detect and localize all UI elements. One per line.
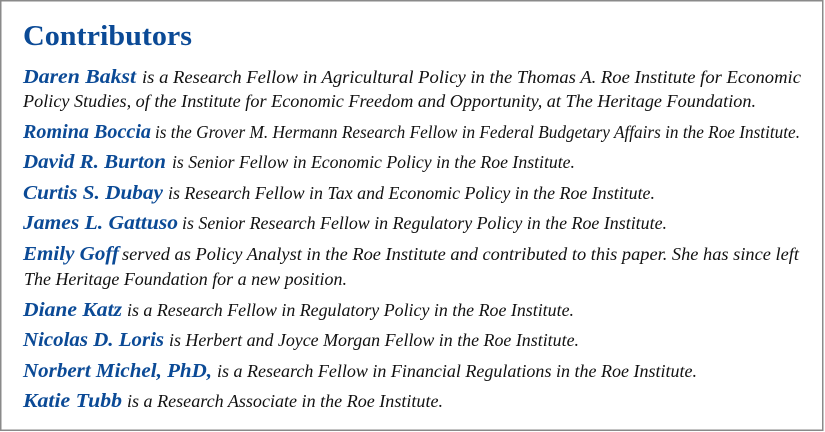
contributor: Daren Bakst: Daren Bakst xyxy=(22,66,138,88)
contributor: Romina Boccia: is the Grover M. Hermann Research Fellow in Federal Budgetary Affairs in the Roe Institute. xyxy=(155,122,800,142)
contributor: Diane Katz: Diane Katz xyxy=(22,299,122,321)
contributor: Curtis S. Dubay: Curtis S. Dubay xyxy=(23,182,163,204)
contributor: David R. Burton xyxy=(22,151,575,173)
contributor: David R. Burton: is Senior Fellow in Economic Policy in the Roe Institute. xyxy=(172,152,575,172)
heading: Contributors xyxy=(23,21,192,52)
contributor: Daren Bakst xyxy=(22,66,801,111)
contributor: Curtis S. Dubay: is Research Fellow in Tax and Economic Policy in the Roe Institute. xyxy=(168,183,655,203)
contributor: Norbert Michel: Norbert Michel, PhD, xyxy=(22,360,212,382)
contributor: Nicolas D. Loris: is Herbert and Joyce Morgan Fellow in the Roe Institute. xyxy=(169,330,579,350)
contributor: David R. Burton: David R. Burton xyxy=(22,151,166,173)
contributor: Diane Katz: is a Research Fellow in Regulatory Policy in the Roe Institute. xyxy=(127,300,574,320)
contributor: James L. Gattuso: James L. Gattuso xyxy=(22,212,178,234)
contributor: Norbert Michel: is a Research Fellow in Financial Regulations in the Roe Institute. xyxy=(217,361,697,381)
contributor: Nicolas D. Loris xyxy=(22,329,579,351)
contributor: Emily Goff: served as Policy Analyst in the Roe Institute and contributed to this paper. She has since left xyxy=(122,244,800,264)
contributor: Katie Tubb xyxy=(22,390,443,412)
contributor: Katie Tubb: Katie Tubb xyxy=(22,390,122,412)
contributor: Emily Goff: The Heritage Foundation for a new position. xyxy=(24,269,347,289)
contributor: Katie Tubb: is a Research Associate in the Roe Institute. xyxy=(127,391,443,411)
contributor: Daren Bakst: is a Research Fellow in Agricultural Policy in the Thomas A. Roe Institute for Economic xyxy=(142,67,801,87)
contributor: Emily Goff xyxy=(22,243,800,289)
contributor: Emily Goff: Emily Goff xyxy=(22,243,121,265)
contributor: Nicolas D. Loris: Nicolas D. Loris xyxy=(22,329,164,351)
contributor: Romina Boccia: Romina Boccia xyxy=(22,121,151,143)
contributor: James L. Gattuso xyxy=(22,212,667,234)
contributor: Norbert Michel xyxy=(22,360,697,382)
contributor: Daren Bakst: Policy Studies, of the Institute for Economic Freedom and Opportunity, at The Heritage Foundation. xyxy=(22,91,756,111)
contributor: Curtis S. Dubay xyxy=(23,182,655,204)
contributor: James L. Gattuso: is Senior Research Fellow in Regulatory Policy in the Roe Institute. xyxy=(182,213,667,233)
